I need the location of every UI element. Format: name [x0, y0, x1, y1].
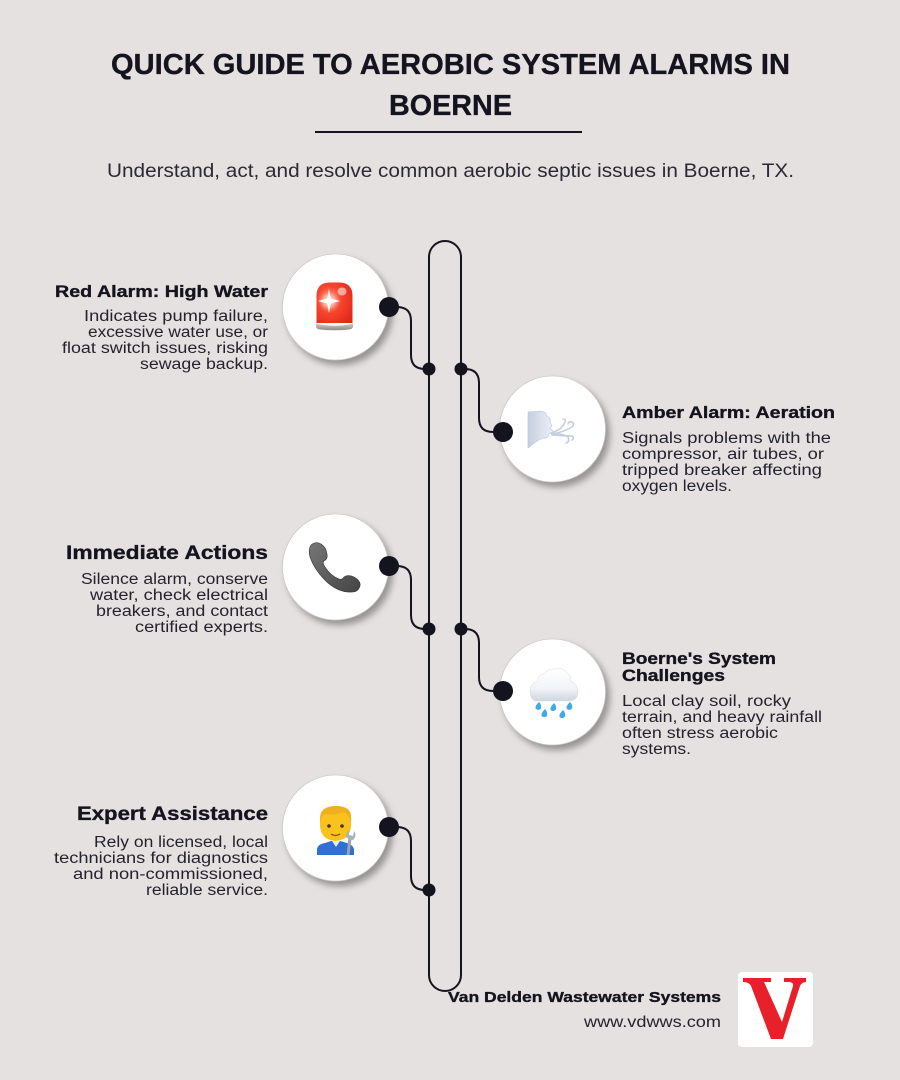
description: red alarm: excessive water use, or: [88, 324, 268, 341]
description: red alarm: sewage backup.: [140, 356, 268, 373]
heading: system challenges: Boerne's System: [622, 649, 776, 668]
panel: red alarm: [55, 254, 399, 373]
connector: amber alarm: [454, 362, 503, 432]
description: immediate actions: water, check electrical: [89, 587, 268, 604]
description: system challenges: often stress aerobic: [622, 725, 778, 742]
description: amber alarm: oxygen levels.: [622, 478, 732, 495]
title: BOERNE: [389, 90, 512, 122]
footer: company name: Van Delden Wastewater Systems: [448, 989, 721, 1006]
footer: website: www.vdwws.com: [583, 1014, 721, 1031]
heading: red alarm: Red Alarm: High Water: [55, 282, 268, 301]
description: immediate actions: Silence alarm, conserve: [81, 571, 268, 588]
panel: system challenges: [493, 639, 822, 758]
description: immediate actions: breakers, and contact: [96, 603, 269, 620]
description: red alarm: Indicates pump failure,: [84, 308, 268, 325]
icon circle: telephone: [282, 514, 388, 620]
description: expert assistance: [54, 834, 268, 899]
description: amber alarm: tripped breaker affecting: [622, 462, 822, 479]
panel: immediate actions: [66, 514, 399, 636]
description: amber alarm: Signals problems with the: [622, 430, 831, 447]
connector: system challenges: [454, 622, 503, 691]
description: system challenges: Local clay soil, rocky: [622, 693, 791, 710]
title underline: [315, 131, 582, 133]
description: expert assistance: technicians for diagnostics: [54, 850, 268, 867]
heading: immediate actions: Immediate Actions: [66, 542, 268, 564]
connector: red alarm: [389, 307, 436, 376]
icon circle: siren: [282, 254, 388, 360]
node dot: siren: [379, 297, 399, 317]
description: amber alarm: compressor, air tubes, or: [622, 446, 824, 463]
description: system challenges: [622, 693, 822, 758]
connector: immediate actions: [389, 566, 436, 636]
node dot: telephone: [379, 556, 399, 576]
node dot: rain cloud: [493, 681, 513, 701]
panel: expert assistance: [54, 775, 399, 899]
heading: system challenges: Challenges: [622, 666, 725, 685]
description: system challenges: systems.: [622, 741, 691, 758]
description: red alarm: float switch issues, risking: [62, 340, 268, 357]
central timeline capsule: [429, 241, 461, 991]
description: expert assistance: and non-commissioned,: [73, 866, 268, 883]
node dot: mechanic: [379, 817, 399, 837]
title: [111, 49, 790, 122]
icon circle: blowing wind face: [500, 376, 606, 482]
description: red alarm: [62, 308, 268, 373]
node dot: wind: [493, 422, 513, 442]
title: QUICK GUIDE TO AEROBIC SYSTEM ALARMS IN: [111, 49, 790, 81]
connector: expert assistance: [389, 827, 436, 896]
subtitle: Understand, act, and resolve common aerobic septic issues in Boerne, TX.: [107, 161, 794, 182]
description: system challenges: terrain, and heavy rainfall: [622, 709, 822, 726]
panel: amber alarm: [493, 376, 835, 495]
description: immediate actions: [81, 571, 269, 636]
description: expert assistance: reliable service.: [146, 882, 268, 899]
heading: expert assistance: Expert Assistance: [77, 803, 268, 825]
description: expert assistance: Rely on licensed, local: [94, 834, 268, 851]
description: amber alarm: [622, 430, 831, 495]
heading: amber alarm: Amber Alarm: Aeration: [622, 403, 835, 422]
heading: system challenges: [622, 649, 776, 685]
logo: [738, 972, 813, 1047]
icon circle: rain cloud: [500, 639, 606, 745]
description: immediate actions: certified experts.: [135, 619, 268, 636]
icon circle: mechanic: [282, 775, 388, 881]
